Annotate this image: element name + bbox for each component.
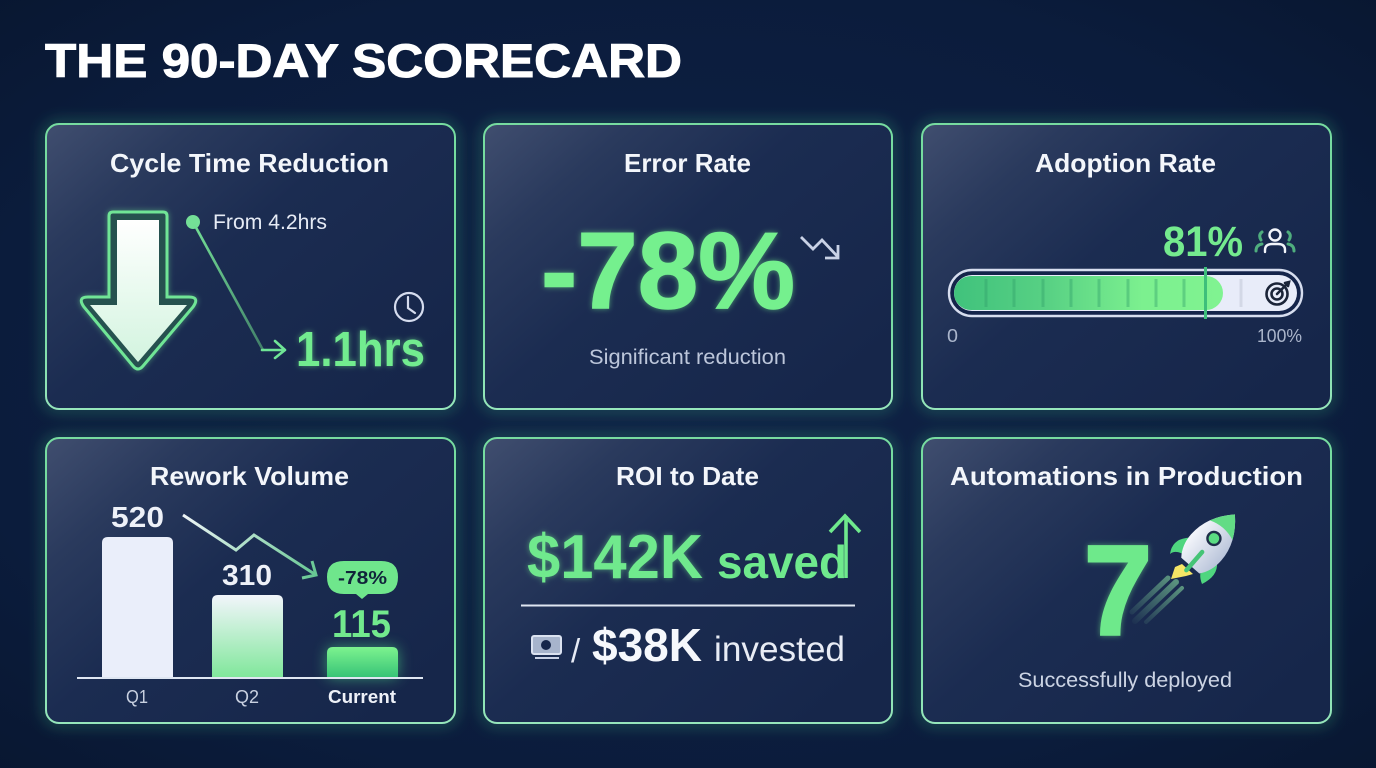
bar: current [327, 647, 398, 678]
caption: significant reduction: Significant reduction [589, 346, 786, 369]
arrow: up [830, 516, 860, 578]
bar: Q1 [102, 537, 173, 678]
caption: successfully deployed: Successfully deployed [1018, 669, 1232, 692]
title: THE 90-DAY SCORECARD [45, 34, 682, 87]
label: invested: invested [714, 630, 845, 669]
icon: target [1266, 282, 1289, 304]
label: Q2: Q2 [235, 687, 259, 707]
icon: trending down [801, 237, 838, 258]
value: 1.1hrs: 1.1hrs [296, 323, 425, 377]
label: Q1: Q1 [126, 687, 148, 707]
grey tick [1240, 279, 1242, 307]
arrow: downward trend [183, 515, 316, 578]
callout: -78% [327, 561, 398, 599]
progress bar [949, 267, 1302, 319]
value: 115: 115 [332, 603, 391, 646]
label: saved: saved [717, 536, 847, 588]
bar chart [77, 502, 423, 707]
callout: -78%: -78% [338, 568, 387, 588]
heading: error rate: Error Rate [624, 148, 751, 178]
rocket fins [1170, 538, 1197, 556]
value: 310: 310 [222, 560, 272, 592]
icon: people [1256, 230, 1294, 252]
rocket flame [1171, 564, 1193, 579]
glow: current bar [327, 647, 398, 678]
value: -78%: -78% [541, 210, 795, 332]
heading: adoption rate: Adoption Rate [1035, 148, 1216, 178]
label: current: Current [328, 687, 396, 707]
value: 520: 520 [111, 502, 164, 534]
panel: adoption rate [922, 124, 1331, 409]
icon: money [532, 636, 561, 659]
panel: ROI to date [484, 438, 892, 723]
divider [521, 604, 855, 606]
text: slash: / [571, 632, 581, 669]
bar: Q2 [212, 595, 283, 678]
panel: rework volume [46, 438, 455, 723]
axis label: 100%: 100% [1257, 326, 1302, 346]
panel: cycle time reduction [46, 124, 455, 409]
label: from 4.2hrs: From 4.2hrs [213, 211, 327, 234]
arrow: slope to result [193, 222, 285, 358]
icon: rocket [1132, 501, 1250, 622]
heading: automations in production: Automations in Production [950, 461, 1303, 491]
panel: automations in production [922, 438, 1331, 723]
icon: clock [395, 293, 423, 321]
value: 81%: 81% [1163, 218, 1243, 266]
marker at 81% [1204, 267, 1207, 319]
value: 7: 7 [1084, 519, 1152, 661]
value: $142K: $142K [527, 523, 703, 592]
start marker [186, 215, 200, 229]
rocket body [1171, 501, 1250, 583]
axis line [77, 677, 423, 679]
heading: ROI to date: ROI to Date [616, 461, 759, 491]
panel: error rate [484, 124, 892, 409]
value: $38K: $38K [592, 619, 702, 671]
heading: cycle time reduction: Cycle Time Reduction [110, 148, 389, 178]
rocket trail [1132, 578, 1182, 622]
icon: large down arrow [81, 212, 196, 369]
axis label: 0: 0 [947, 326, 958, 346]
heading: rework volume: Rework Volume [150, 461, 349, 491]
bar ticks [986, 279, 1184, 307]
